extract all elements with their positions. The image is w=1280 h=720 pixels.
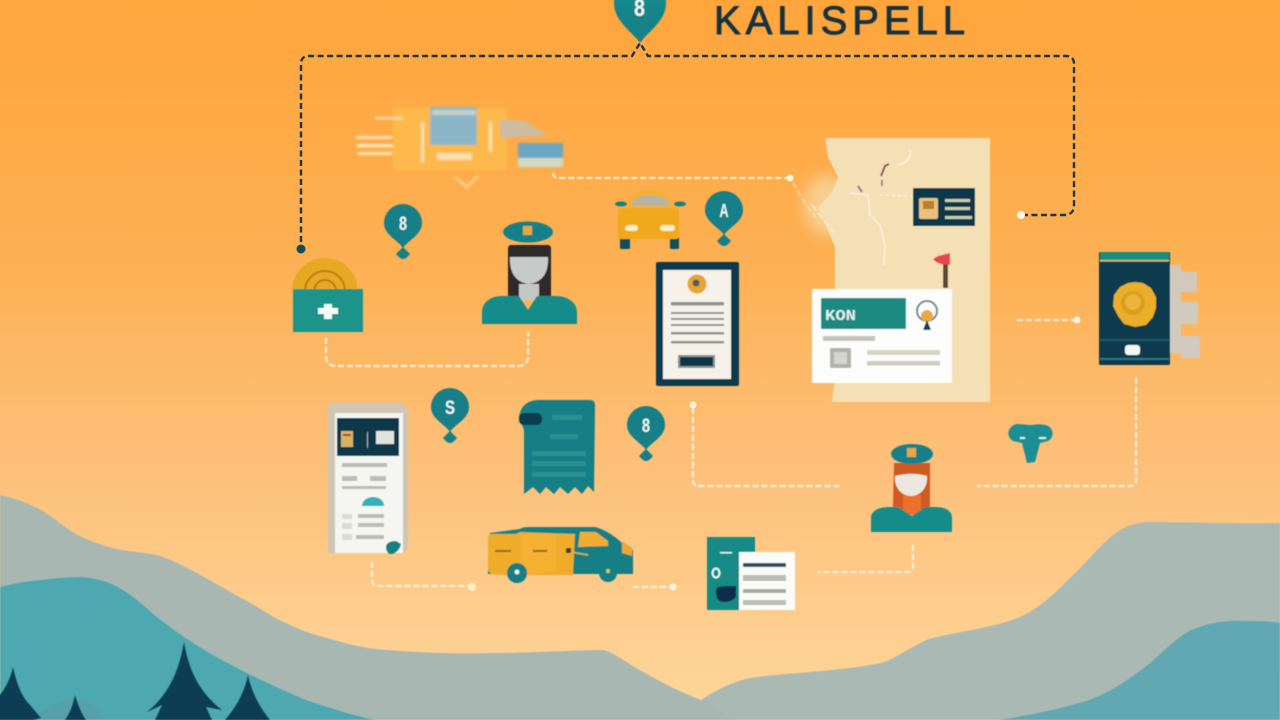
icon: teal and yellow van — [488, 527, 633, 583]
map route marks — [858, 164, 889, 192]
pine trees — [0, 642, 270, 720]
title: KALISPELL — [714, 0, 965, 43]
icon: map pin B: A — [720, 201, 728, 221]
icon: report sheet — [328, 403, 408, 554]
small ID card — [913, 188, 975, 226]
connector: dark dashed route — [301, 43, 1074, 242]
large ID card — [812, 289, 952, 383]
connector dots — [468, 174, 1080, 591]
state map panel — [804, 138, 990, 402]
icon: map pin C — [431, 388, 469, 443]
icon: yellow car — [615, 190, 686, 249]
icon: map pin D: 8 — [642, 416, 650, 437]
icon: map pin A — [384, 204, 422, 259]
icon: passport with gold seal — [1099, 252, 1200, 365]
map roads — [812, 150, 912, 265]
icon: top location pin — [614, 0, 666, 43]
red flag — [933, 253, 950, 288]
connector: dark route start dot — [296, 244, 306, 254]
icon: map pin B — [705, 191, 743, 246]
mountain range landscape — [0, 495, 1280, 720]
icon: coin folder — [292, 258, 363, 332]
icon: document with seal — [656, 262, 739, 386]
icon: map pin C: S — [445, 398, 455, 419]
connector: dark route end dot — [1017, 211, 1025, 219]
icon: delivery truck (faded) — [356, 107, 563, 187]
icon: map pin D — [627, 406, 665, 461]
icon: map pin A: 8 — [399, 214, 407, 235]
connectors: white dashed routes — [326, 173, 1136, 587]
large ID card: KON — [825, 308, 856, 325]
icon: officer with red hair — [871, 444, 952, 532]
icon: teal torn receipt — [519, 400, 595, 494]
icon: teal folder with sheet — [707, 537, 795, 610]
icon: officer with dark hair — [482, 222, 577, 324]
icon: teal funnel badge — [1008, 424, 1052, 463]
